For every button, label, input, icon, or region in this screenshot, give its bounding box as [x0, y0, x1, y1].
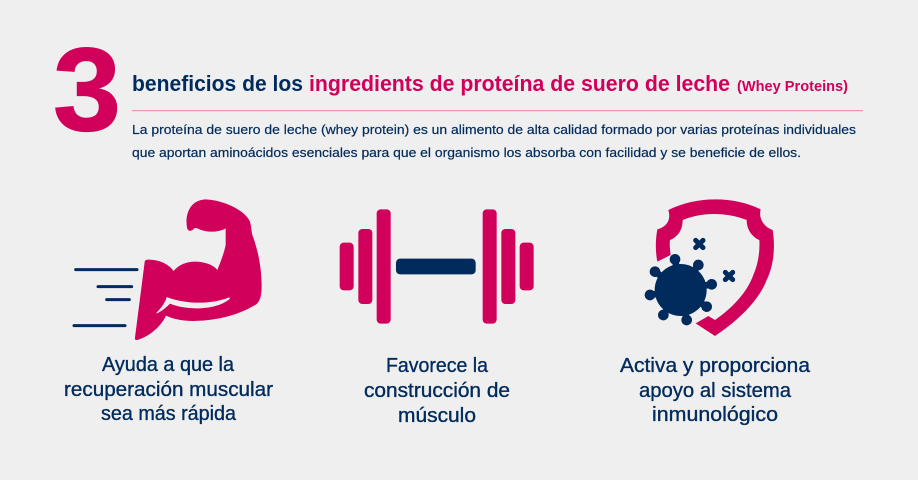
icon: flexed arm with speed lines: [74, 199, 262, 340]
caption: immune support: inmunológico: [652, 404, 778, 426]
caption: immune support: [620, 355, 811, 426]
caption: muscle building: construcción de: [364, 380, 510, 402]
caption: muscle building: músculo: [398, 405, 476, 427]
icon: shield with virus: [645, 199, 774, 336]
title: ingredients de proteína de suero de leche: [309, 71, 730, 96]
intro text: [132, 122, 857, 160]
title: (Whey Proteins): [737, 79, 848, 95]
intro text: que aportan aminoácidos esenciales para que el organismo los absorba con facilidad y se beneficie de ellos.: [132, 145, 801, 160]
title: beneficios de los: [132, 71, 303, 96]
caption: recovery: Ayuda a que la: [102, 354, 235, 376]
caption: muscle building: Favorece la: [386, 355, 489, 377]
caption: recovery: sea más rápida: [101, 403, 237, 425]
caption: recovery: [64, 354, 273, 425]
intro text: La proteína de suero de leche (whey protein) es un alimento de alta calidad formado por varias proteínas individuales: [132, 122, 857, 137]
icon: dumbbell: [340, 209, 534, 324]
caption: muscle building: [364, 355, 510, 427]
caption: immune support: Activa y proporciona: [620, 355, 811, 377]
big number 3: 3: [53, 24, 121, 156]
title: [132, 71, 848, 96]
caption: recovery: recuperación muscular: [64, 379, 273, 401]
caption: immune support: apoyo al sistema: [639, 380, 792, 402]
